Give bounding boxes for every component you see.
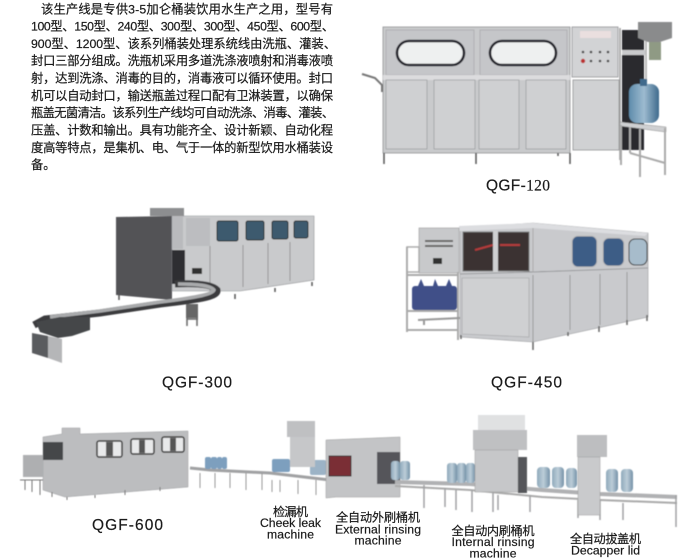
label: QGF-120: QGF-120 — [486, 178, 550, 194]
intro text block: 压盖、计数和输出。具有功能齐全、设计新颖、自动化程 — [31, 122, 333, 138]
intro text block: 900型、1200型、该系列桶装处理系统线由洗瓶、灌装、 — [31, 36, 336, 51]
label: decapper: 全自动拔盖机 — [570, 531, 641, 546]
label: external rinsing machine: machine — [354, 534, 402, 548]
label: leak check machine — [260, 504, 322, 542]
label: internal rinsing machine — [452, 523, 534, 560]
label: decapper: Decapper lid — [571, 544, 640, 558]
label: external rinsing machine: 全自动外刷桶机 — [336, 510, 420, 524]
label: leak check machine: Cheek leak — [260, 516, 322, 530]
label: decapper — [570, 531, 641, 558]
intro text block: 封口三部分组成。洗瓶机采用多道洗涤液喷射和消毒液喷 — [31, 53, 333, 68]
intro text block: 射，达到洗涤、消毒的目的，消毒液可以循环使用。封口 — [31, 70, 333, 86]
intro text block: 机可以自动封口，输送瓶盖过程口配有卫淋装置，以确保 — [31, 88, 334, 103]
machine: QGF-300 — [32, 208, 314, 363]
label: QGF-300: QGF-300 — [162, 375, 232, 392]
label: external rinsing machine: External rinsing — [335, 522, 421, 536]
label: leak check machine: 检漏机 — [273, 504, 308, 519]
intro text block: 100型、150型、240型、300型、300型、450型、600型、 — [31, 20, 334, 34]
intro text block: 该生产线是专供3-5加仑桶装饮用水生产之用，型号有 — [41, 2, 333, 16]
label: QGF-600: QGF-600 — [92, 517, 163, 534]
intro text block: 度高等特点，是集机、电、气于一体的新型饮用水桶装设 — [31, 140, 333, 155]
intro text block — [31, 2, 336, 172]
label: leak check machine: machine — [267, 528, 314, 542]
label: external rinsing machine — [335, 510, 421, 548]
machine: QGF-450 — [406, 223, 648, 350]
intro text block: 瓶盖无菌清洁。该系列生产线均可自动洗涤、消毒、灌装、 — [31, 106, 334, 120]
machine: QGF-120 — [362, 22, 672, 177]
intro text block: 备。 — [31, 158, 56, 172]
label: internal rinsing machine: 全自动内刷桶机 — [452, 523, 534, 538]
label: QGF-450: QGF-450 — [491, 375, 562, 392]
label: internal rinsing machine: Internal rinsing — [452, 535, 534, 549]
machine: QGF-600 with production line — [20, 415, 677, 527]
